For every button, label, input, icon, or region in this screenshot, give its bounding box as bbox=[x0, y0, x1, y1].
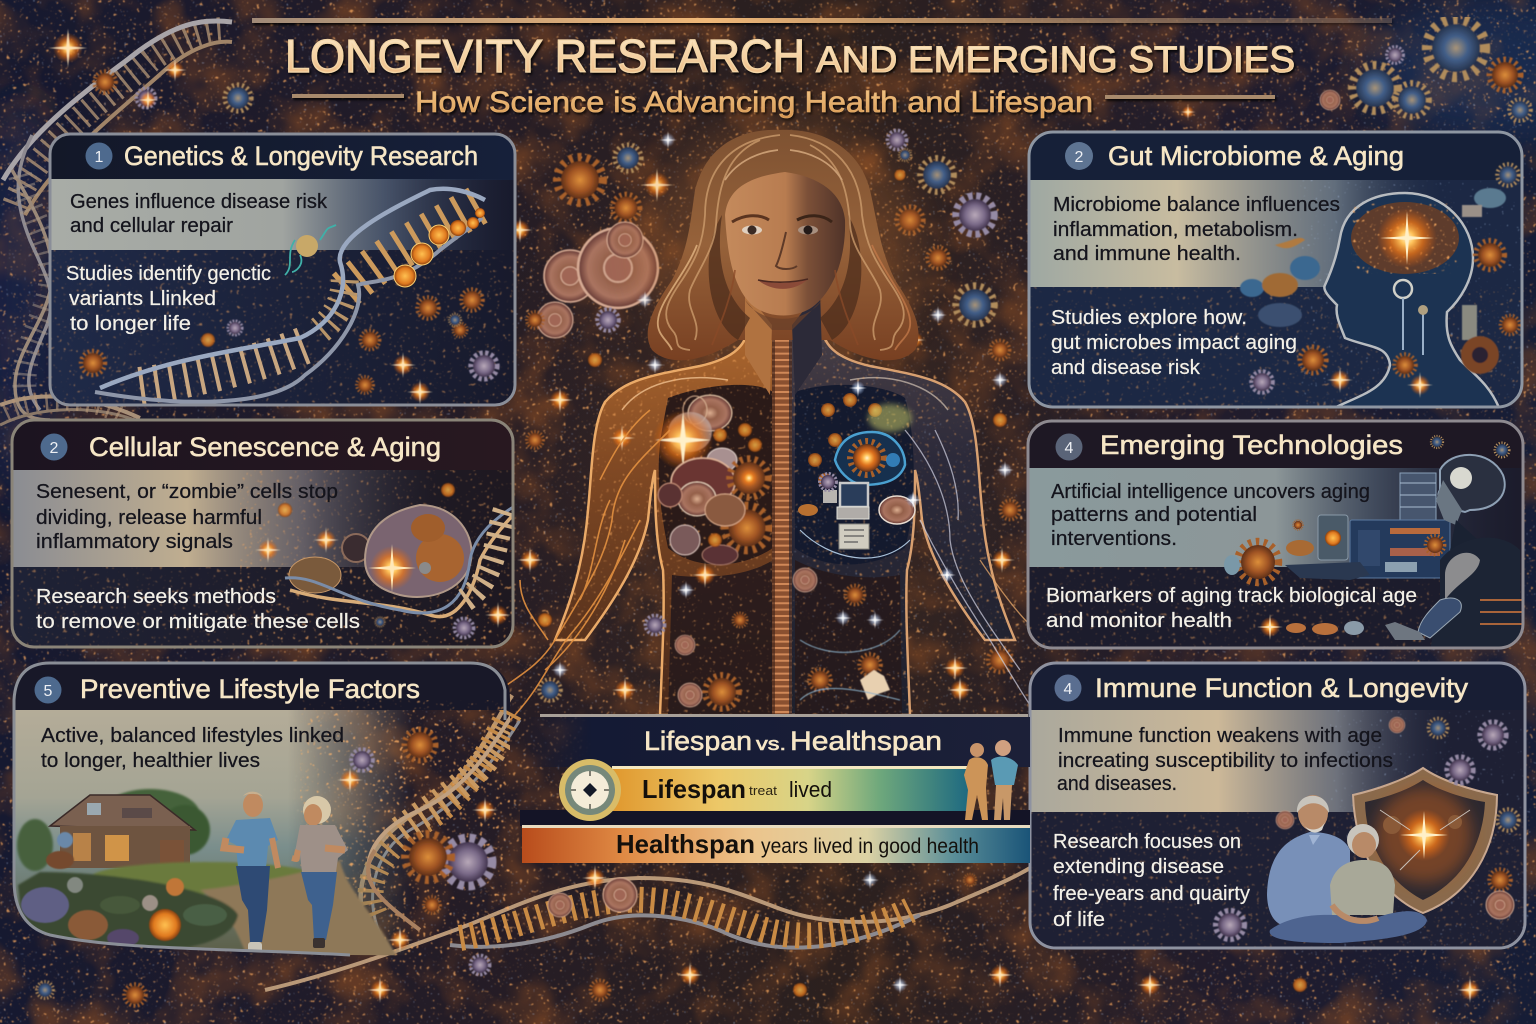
subtitle bbox=[292, 86, 1275, 119]
text: microbiome balance: Microbiome balance influences bbox=[1053, 194, 1340, 216]
spine bbox=[772, 327, 792, 717]
hair shadow beside face bbox=[709, 215, 861, 340]
lower body cells bbox=[645, 562, 968, 709]
text: senescent cells: inflammatory signals bbox=[36, 531, 233, 553]
organs: right tech side bbox=[798, 379, 956, 584]
panel: genetics and longevity research bbox=[50, 134, 515, 405]
number badge: 2 bbox=[1075, 149, 1084, 166]
number badge bbox=[86, 142, 112, 170]
text: studies explore: gut microbes impact aging bbox=[1051, 332, 1297, 354]
number badge bbox=[40, 434, 68, 460]
number badge bbox=[1056, 434, 1082, 460]
illustration: older man bbox=[1267, 795, 1350, 927]
text: research focuses: Research focuses on bbox=[1053, 831, 1241, 853]
torso and arms bbox=[555, 320, 1015, 715]
text: active lifestyles: Active, balanced lifestyles linked bbox=[41, 725, 344, 747]
panel: gut microbiome and aging bbox=[1029, 132, 1522, 410]
number badge bbox=[1054, 674, 1082, 702]
text: active lifestyles: to longer, healthier lives bbox=[41, 750, 260, 772]
hair strands bbox=[658, 135, 910, 350]
text: studies identify: variants Llinked bbox=[69, 288, 216, 310]
dna: middle left bbox=[361, 678, 520, 945]
decorative cells: bottom band bbox=[37, 217, 1483, 1006]
body speckles bbox=[550, 320, 1020, 720]
heading: Genetics & Longevity Research bbox=[124, 141, 478, 171]
text: artificial intelligence: interventions. bbox=[1051, 528, 1177, 550]
illustration: server stack bbox=[1400, 473, 1436, 523]
heading: Immune Function & Longevity bbox=[1095, 673, 1469, 703]
title: AND EMERGING STUDIES bbox=[816, 39, 1295, 80]
text: immune function: and diseases. bbox=[1057, 773, 1177, 795]
number badge: 5 bbox=[44, 683, 53, 700]
text: senescent cells: Senesent, or “zombie” cells stop bbox=[36, 481, 338, 503]
text: immune function: increating susceptibility to infections bbox=[1058, 750, 1393, 772]
title bbox=[252, 18, 1392, 82]
heading: Preventive Lifestyle Factors bbox=[80, 674, 420, 704]
number badge: 2 bbox=[50, 440, 59, 457]
text: studies explore: and disease risk bbox=[1051, 357, 1201, 379]
lifespan bar: treat bbox=[749, 783, 777, 798]
panel: cellular senescence and aging bbox=[12, 420, 575, 647]
face bbox=[725, 172, 845, 316]
central figure: woman bbox=[500, 120, 1030, 720]
panel: immune function and longevity bbox=[1030, 663, 1525, 948]
healthspan bar bbox=[522, 825, 1030, 863]
heading: Emerging Technologies bbox=[1100, 430, 1403, 460]
illustration: dna strand bbox=[284, 506, 512, 618]
heading: vs. bbox=[756, 734, 786, 754]
text: active lifestyles bbox=[41, 725, 344, 772]
dna: top left bbox=[0, 21, 232, 425]
number badge bbox=[1065, 142, 1093, 170]
lifespan bar: lived bbox=[789, 777, 832, 802]
text: genes influence bbox=[70, 191, 328, 237]
text: studies identify: to longer life bbox=[70, 313, 191, 335]
lifespan bar: Lifespan bbox=[642, 774, 746, 804]
illustration: android figure bbox=[1385, 455, 1522, 650]
heading bbox=[644, 726, 942, 756]
text: microbiome balance bbox=[1053, 194, 1340, 265]
text: immune function: Immune function weakens with age bbox=[1058, 725, 1382, 747]
lower abdomen interior bbox=[668, 560, 902, 715]
illustration: house bbox=[50, 795, 195, 868]
text: research focuses: extending disease bbox=[1053, 856, 1224, 878]
text: studies identify bbox=[66, 263, 271, 335]
dna: bottom centre bbox=[265, 868, 1030, 990]
illustration: head silhouette with brain bbox=[1324, 193, 1500, 410]
right chest interior bbox=[795, 385, 914, 564]
text: immune function bbox=[1057, 725, 1393, 795]
neck bbox=[745, 290, 772, 395]
illustration: monitor console bbox=[1285, 520, 1450, 580]
illustration: jogging man bbox=[224, 792, 278, 954]
healthspan bar: years lived in good health bbox=[761, 835, 979, 858]
illustration: senescent cell cluster bbox=[289, 505, 472, 597]
number badge: 4 bbox=[1064, 681, 1073, 698]
heading: Cellular Senescence & Aging bbox=[89, 432, 441, 462]
text: research seeks: Research seeks methods bbox=[36, 586, 276, 608]
text: studies identify: Studies identify genctic bbox=[66, 263, 271, 285]
text: genes influence: Genes influence disease risk bbox=[70, 191, 328, 213]
text: artificial intelligence bbox=[1051, 481, 1370, 550]
text: studies explore: Studies explore how. bbox=[1051, 307, 1247, 329]
number badge: 4 bbox=[1065, 440, 1074, 457]
illustration: specimen jar bbox=[1318, 515, 1348, 560]
icon: walking couple bbox=[964, 740, 1018, 820]
illustration: shield bbox=[1353, 768, 1497, 913]
central figure background cells bbox=[517, 130, 1020, 703]
panel: preventive lifestyle factors bbox=[13, 663, 513, 965]
text: research seeks: to remove or mitigate these cells bbox=[36, 611, 360, 633]
illustration: dna strand bbox=[95, 189, 485, 402]
illustration: dna strand bbox=[368, 715, 512, 930]
illustration: garden plants bbox=[21, 832, 227, 947]
text: microbiome balance: inflammation, metabolism. bbox=[1053, 219, 1298, 241]
panel: lifespan vs healthspan bbox=[520, 714, 1030, 863]
lifespan bar bbox=[612, 766, 968, 811]
text: research seeks bbox=[36, 586, 360, 633]
illustration: neuron cell bbox=[285, 225, 336, 275]
text: genes influence: and cellular repair bbox=[70, 215, 233, 237]
heading: Healthspan bbox=[790, 726, 942, 756]
text: biomarkers bbox=[1046, 585, 1417, 632]
hair bbox=[648, 130, 918, 360]
decorative cells: title band bbox=[48, 19, 1531, 121]
organs: left cellular side bbox=[609, 395, 769, 565]
healthspan bar: Healthspan bbox=[616, 829, 755, 859]
text: research focuses bbox=[1053, 831, 1250, 931]
illustration: jogging woman bbox=[292, 796, 348, 948]
title: LONGEVITY RESEARCH bbox=[285, 30, 805, 82]
number badge bbox=[34, 676, 62, 704]
illustration: glowing dna nodes bbox=[394, 208, 485, 287]
text: senescent cells bbox=[36, 481, 338, 553]
text: senescent cells: dividing, release harmful bbox=[36, 507, 262, 529]
text: microbiome balance: and immune health. bbox=[1053, 243, 1241, 265]
illustration: microbe clusters bbox=[1240, 164, 1520, 398]
hair glow bbox=[642, 120, 922, 380]
text: biomarkers: and monitor health bbox=[1046, 610, 1232, 632]
number badge: 1 bbox=[95, 149, 104, 166]
text: biomarkers: Biomarkers of aging track biological age bbox=[1046, 585, 1417, 607]
illustration: lawn and path bbox=[18, 860, 400, 965]
heading: Gut Microbiome & Aging bbox=[1108, 141, 1404, 171]
text: studies explore bbox=[1051, 307, 1297, 379]
nerve branches: left bbox=[500, 410, 670, 720]
text: artificial intelligence: Artificial intelligence uncovers aging bbox=[1051, 481, 1370, 503]
panel: emerging technologies bbox=[1028, 421, 1523, 650]
subtitle: How Science is Advancing Health and Lifespan bbox=[415, 86, 1093, 119]
nerve branches: right bbox=[905, 430, 1030, 705]
text: research focuses: of life bbox=[1053, 909, 1105, 931]
left chest interior bbox=[659, 385, 773, 564]
heading: Lifespan bbox=[644, 726, 752, 756]
illustration: older woman bbox=[1270, 824, 1427, 943]
text: research focuses: free-years and quairty bbox=[1053, 883, 1250, 905]
illustration: trees bbox=[17, 789, 210, 871]
text: artificial intelligence: patterns and potential bbox=[1051, 504, 1257, 526]
dial icon bbox=[559, 759, 621, 821]
